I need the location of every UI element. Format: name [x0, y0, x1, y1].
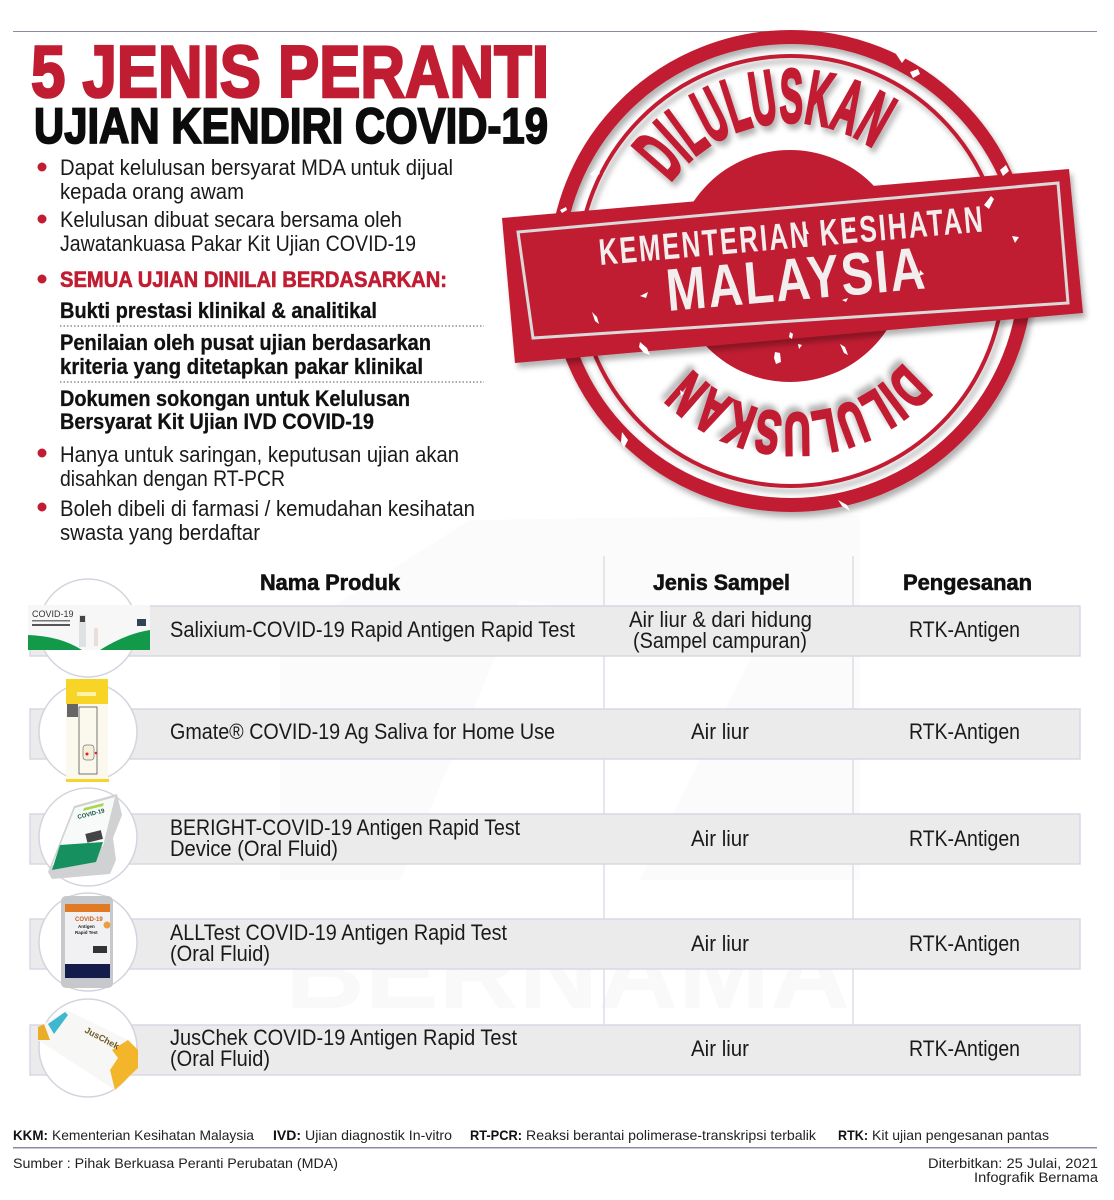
- publication credit: Infografik Bernama: [974, 1169, 1098, 1185]
- product image: Salixium box: COVID-19: [32, 609, 74, 619]
- abbreviations legend: IVD:: [273, 1127, 301, 1143]
- stamp banner: [502, 169, 1083, 363]
- banner text: Malaysia: MALAYSIA: [663, 235, 927, 324]
- background watermark: Bernama logo: [280, 515, 860, 1030]
- product image: BERIGHT cassette: COVID-19: [77, 808, 106, 821]
- abbreviations legend: RTK:: [838, 1127, 868, 1143]
- row: JusChek: Air liur: [691, 1036, 749, 1061]
- assessment criteria: Penilaian oleh pusat ujian berdasarkan: [60, 330, 431, 355]
- bullet: where to buy: swasta yang berdaftar: [60, 520, 260, 545]
- row: Gmate: RTK-Antigen: [909, 719, 1020, 744]
- product image: ALLTest cassette: [39, 893, 137, 991]
- title: [31, 32, 549, 154]
- bullet: joint approval: [38, 207, 416, 256]
- table header: Pengesanan: [903, 570, 1032, 595]
- stamp distress marks: [560, 49, 1019, 511]
- product image: JusChek box: JusChek: [83, 1025, 122, 1052]
- bullet: screening only: Hanya untuk saringan, keputusan ujian akan: [60, 442, 459, 467]
- assessment criteria: kriteria yang ditetapkan pakar klinikal: [60, 354, 423, 379]
- row: JusChek: RTK-Antigen: [909, 1036, 1020, 1061]
- row: JusChek: (Oral Fluid): [170, 1046, 270, 1071]
- abbreviations legend: [13, 1127, 1049, 1143]
- product image: ALLTest cassette: Rapid Test: [75, 930, 98, 935]
- row: Gmate: [30, 709, 1080, 759]
- row: Salixium: [30, 606, 1080, 656]
- title: UJIAN KENDIRI COVID-19: [34, 98, 548, 154]
- row: Salixium: Air liur & dari hidung: [629, 607, 812, 632]
- title: 5 JENIS PERANTI: [31, 32, 549, 113]
- abbreviations legend: Kementerian Kesihatan Malaysia: [52, 1127, 254, 1143]
- assessment criteria: Bersyarat Kit Ujian IVD COVID-19: [60, 409, 374, 434]
- row: BERIGHT: [30, 814, 1080, 864]
- bullet: joint approval: Jawatankuasa Pakar Kit Ujian COVID-19: [60, 231, 416, 256]
- stamp rings: [556, 37, 1026, 505]
- assessment criteria: [60, 298, 484, 434]
- source credit: Sumber : Pihak Berkuasa Peranti Perubatan (MDA): [13, 1155, 338, 1171]
- row: BERIGHT: BERIGHT-COVID-19 Antigen Rapid Test: [170, 815, 520, 840]
- abbreviations legend: Kit ujian pengesanan pantas: [872, 1127, 1049, 1143]
- row: ALLTest: RTK-Antigen: [909, 931, 1020, 956]
- product image: BERIGHT cassette: [39, 788, 137, 886]
- assessment criteria: Bukti prestasi klinikal & analitikal: [60, 298, 377, 323]
- abbreviations legend: Ujian diagnostik In-vitro: [305, 1127, 452, 1143]
- row: Salixium: (Sampel campuran): [633, 628, 807, 653]
- product image: JusChek box: [38, 999, 138, 1097]
- banner text: ministry: KEMENTERIAN KESIHATAN: [597, 198, 984, 273]
- product image: ALLTest cassette: Antigen: [78, 924, 95, 929]
- table header: [260, 570, 1032, 595]
- background watermark: Bernama logo: BERNAMA: [285, 916, 850, 1030]
- table header: Nama Produk: [260, 570, 401, 595]
- row: BERIGHT: Air liur: [691, 826, 749, 851]
- row: ALLTest: (Oral Fluid): [170, 941, 270, 966]
- bullet: assessment heading: SEMUA UJIAN DINILAI BERDASARKAN:: [60, 267, 447, 292]
- stamp text: DILULUSKAN bottom: DILULUSKAN: [659, 356, 934, 456]
- product image: Salixium box: [28, 579, 150, 677]
- row: Salixium: RTK-Antigen: [909, 617, 1020, 642]
- row: ALLTest: ALLTest COVID-19 Antigen Rapid Test: [170, 920, 507, 945]
- row: BERIGHT: RTK-Antigen: [909, 826, 1020, 851]
- row: BERIGHT: Device (Oral Fluid): [170, 836, 338, 861]
- product image: ALLTest cassette: COVID-19: [75, 917, 103, 923]
- assessment criteria: Dokumen sokongan untuk Kelulusan: [60, 386, 410, 411]
- approval stamp: [502, 30, 1089, 520]
- product image: Gmate pack: [39, 679, 137, 782]
- bullet: conditional approval: [38, 155, 453, 204]
- bullet: where to buy: Boleh dibeli di farmasi / kemudahan kesihatan: [60, 496, 475, 521]
- publication credit: [928, 1155, 1098, 1185]
- abbreviations legend: Reaksi berantai polimerase-transkripsi terbalik: [526, 1127, 817, 1143]
- bullet: where to buy: [38, 496, 475, 545]
- row: JusChek: [30, 1025, 1080, 1075]
- row: ALLTest: Air liur: [691, 931, 749, 956]
- bullet: joint approval: Kelulusan dibuat secara bersama oleh: [60, 207, 402, 232]
- table header: Jenis Sampel: [653, 570, 790, 595]
- bullet: conditional approval: kepada orang awam: [60, 179, 244, 204]
- row: JusChek: JusChek COVID-19 Antigen Rapid Test: [170, 1025, 517, 1050]
- abbreviations legend: RT-PCR:: [470, 1127, 522, 1143]
- bullet: screening only: [38, 442, 459, 491]
- row: Salixium: Salixium-COVID-19 Rapid Antigen Rapid Test: [170, 617, 575, 642]
- row: Gmate: Gmate® COVID-19 Ag Saliva for Home Use: [170, 719, 555, 744]
- stamp text: DILULUSKAN top: DILULUSKAN: [630, 68, 904, 189]
- table column dividers: [604, 556, 853, 1075]
- bullet list: [38, 155, 484, 545]
- publication credit: Diterbitkan: 25 Julai, 2021: [928, 1155, 1098, 1171]
- row: ALLTest: [30, 919, 1080, 969]
- abbreviations legend: KKM:: [13, 1127, 48, 1143]
- bullet: conditional approval: Dapat kelulusan bersyarat MDA untuk dijual: [60, 155, 453, 180]
- row: Gmate: Air liur: [691, 719, 749, 744]
- bullet: screening only: disahkan dengan RT-PCR: [60, 466, 285, 491]
- stamp centre disc: [674, 150, 906, 382]
